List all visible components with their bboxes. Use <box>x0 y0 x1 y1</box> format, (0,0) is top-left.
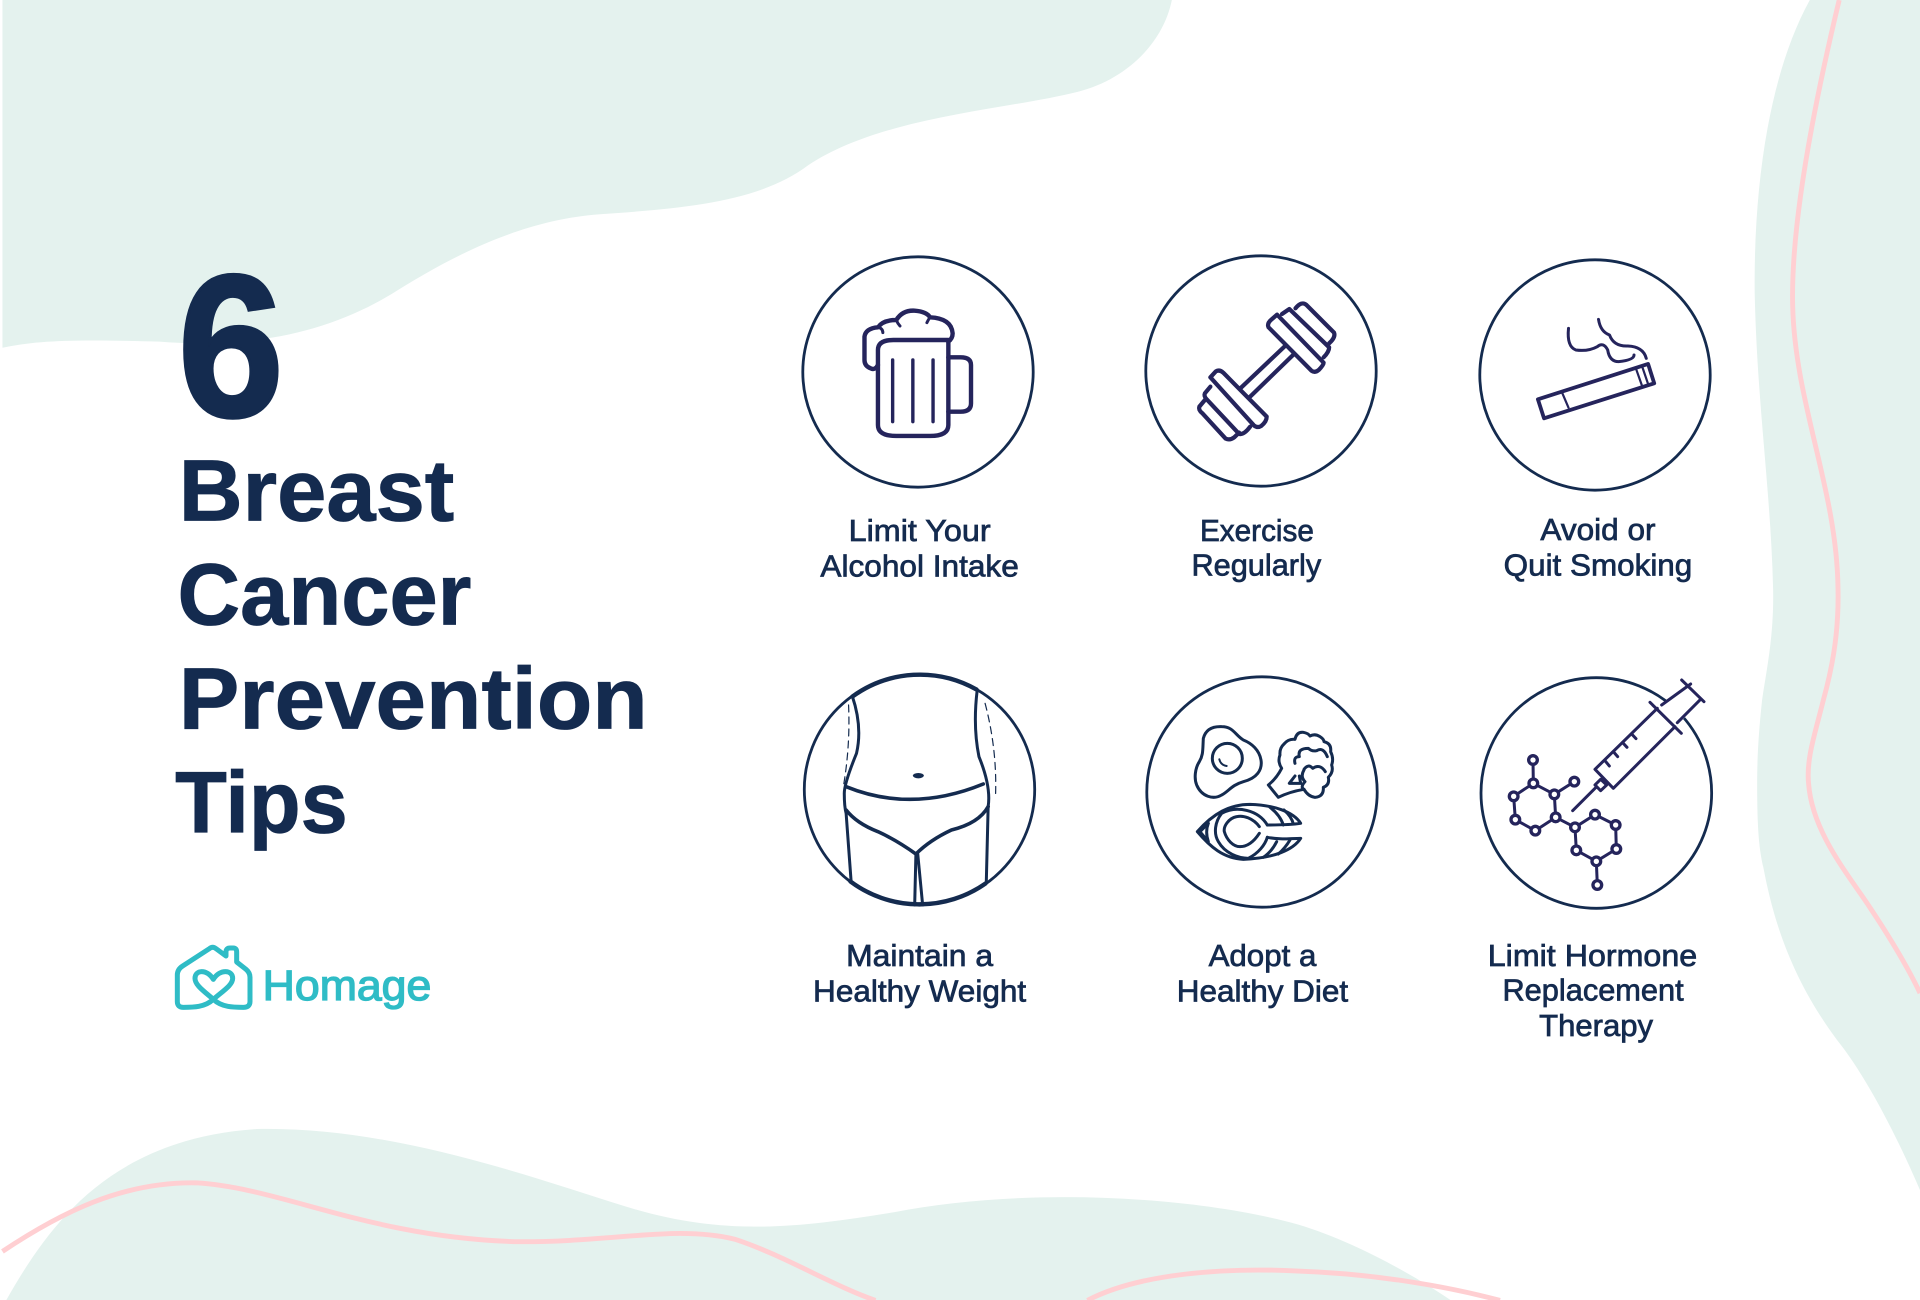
tip label: exercise: Regularly <box>1191 549 1322 583</box>
tip label: alcohol: Alcohol Intake <box>820 550 1019 584</box>
tip label: smoking: Quit Smoking <box>1504 549 1692 583</box>
tip label: diet: Adopt a <box>1209 939 1317 973</box>
logo: Homage <box>177 947 431 1010</box>
tip label: hormone therapy <box>1488 939 1697 1043</box>
tip label: hormone therapy: Replacement <box>1502 973 1684 1007</box>
tip label: exercise <box>1191 514 1322 583</box>
syringe <box>1573 680 1704 811</box>
logo wordmark: Homage <box>263 962 431 1010</box>
tip label: hormone therapy: Therapy <box>1539 1009 1654 1043</box>
tip label: alcohol <box>820 514 1019 584</box>
tip label: diet <box>1177 939 1349 1009</box>
tip label: smoking <box>1504 513 1692 583</box>
tip label: weight <box>813 939 1027 1009</box>
logo icon: house with heart <box>177 947 250 1007</box>
title: Breast <box>179 442 454 539</box>
title <box>175 233 648 852</box>
pink line: bottom right <box>1087 1270 1500 1300</box>
icon: healthy food <box>1147 677 1377 907</box>
tip label: smoking: Avoid or <box>1540 513 1656 547</box>
pink line: right <box>1793 0 1920 993</box>
molecule <box>1509 756 1621 889</box>
tip label: alcohol: Limit Your <box>849 514 991 548</box>
title: 6 <box>178 233 284 460</box>
title: Prevention <box>179 651 648 748</box>
salmon steak <box>1197 804 1301 859</box>
tip label: weight: Healthy Weight <box>813 975 1027 1009</box>
fried egg <box>1195 727 1261 797</box>
tip label: weight: Maintain a <box>846 939 994 973</box>
background blob: right <box>1755 0 1920 1190</box>
broccoli <box>1268 732 1333 797</box>
icon: syringe and molecule <box>1481 678 1712 908</box>
tip label: exercise: Exercise <box>1200 514 1314 548</box>
tip label: diet: Healthy Diet <box>1177 975 1349 1009</box>
pink line: bottom left <box>2 1183 876 1300</box>
icon: cigarette <box>1480 260 1710 490</box>
icon: barbell <box>1146 256 1376 486</box>
title: Tips <box>175 755 348 852</box>
title: Cancer <box>178 546 471 643</box>
tip label: hormone therapy: Limit Hormone <box>1488 939 1697 973</box>
background blob: bottom <box>6 1129 1451 1300</box>
icon: beer mug <box>803 257 1033 487</box>
background blob: top left <box>2 0 1172 348</box>
icon: waist <box>804 674 1035 905</box>
